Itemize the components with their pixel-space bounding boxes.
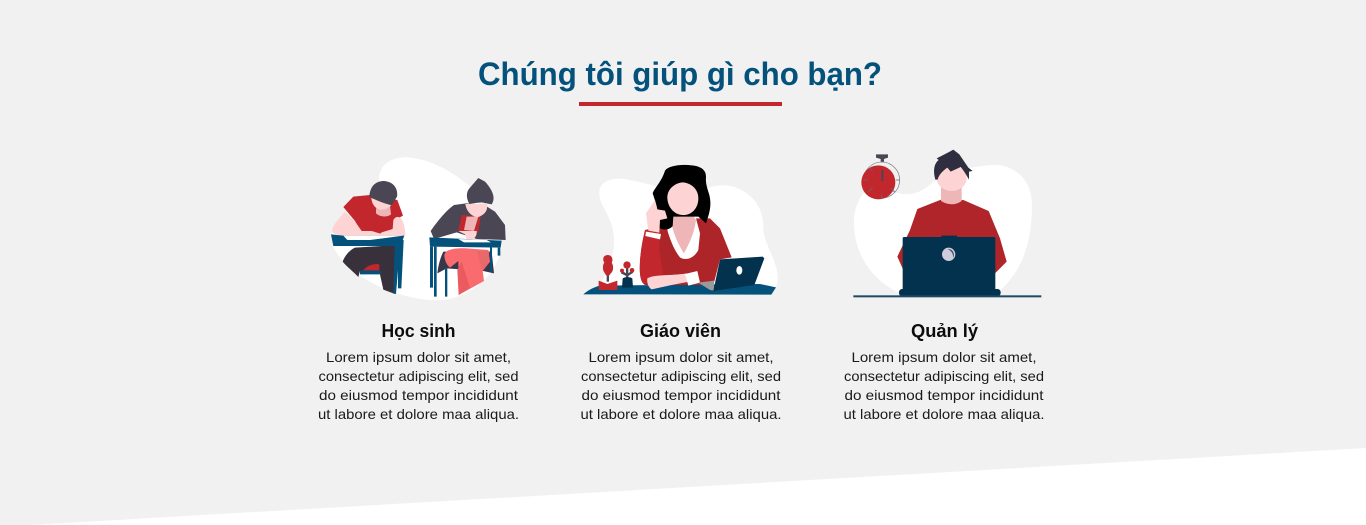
illustration: teacher (583, 165, 778, 295)
blob (854, 165, 1032, 293)
card: Giáo viên: do eiusmod tempor incididunt (582, 387, 781, 403)
card: Giáo viên: Lorem ipsum dolor sit amet, (588, 349, 774, 365)
title underline (579, 102, 782, 106)
card: Học sinh: Lorem ipsum dolor sit amet, (326, 349, 511, 365)
card: Học sinh: do eiusmod tempor incididunt (319, 387, 518, 403)
card: Học sinh: ut labore et dolore maa aliqua. (318, 406, 519, 422)
card: Giáo viên: ut labore et dolore maa aliqua. (580, 406, 782, 422)
blob (599, 179, 778, 292)
card: Giáo viên: consectetur adipiscing elit, sed (581, 368, 781, 384)
card: Học sinh: consectetur adipiscing elit, sed (318, 368, 518, 384)
title: Chúng tôi giúp gì cho bạn? (478, 56, 882, 92)
table (583, 284, 776, 295)
background wedge (30, 448, 1366, 525)
laptop (853, 236, 1041, 297)
card: Quản lý (844, 321, 1044, 422)
card: Quản lý: Lorem ipsum dolor sit amet, (852, 349, 1036, 365)
potted plant (599, 255, 617, 290)
stopwatch (861, 154, 900, 199)
illustration: students (331, 157, 506, 300)
card: Quản lý: ut labore et dolore maa aliqua. (844, 406, 1044, 422)
card: Học sinh: Học sinh (382, 321, 456, 341)
card: Quản lý: Quản lý (911, 321, 978, 341)
card: Giáo viên: Giáo viên (640, 321, 721, 341)
illustration: manager (853, 150, 1041, 297)
teacher figure (640, 165, 732, 289)
small plant (620, 261, 634, 288)
manager figure (897, 150, 1007, 273)
card: Giáo viên (580, 321, 782, 422)
student right (429, 178, 506, 297)
card: Học sinh (318, 321, 519, 422)
student left (331, 181, 405, 294)
card: Quản lý: do eiusmod tempor incididunt (844, 387, 1044, 403)
card: Quản lý: consectetur adipiscing elit, sed (844, 368, 1044, 384)
blob (332, 157, 502, 300)
laptop (698, 257, 764, 291)
